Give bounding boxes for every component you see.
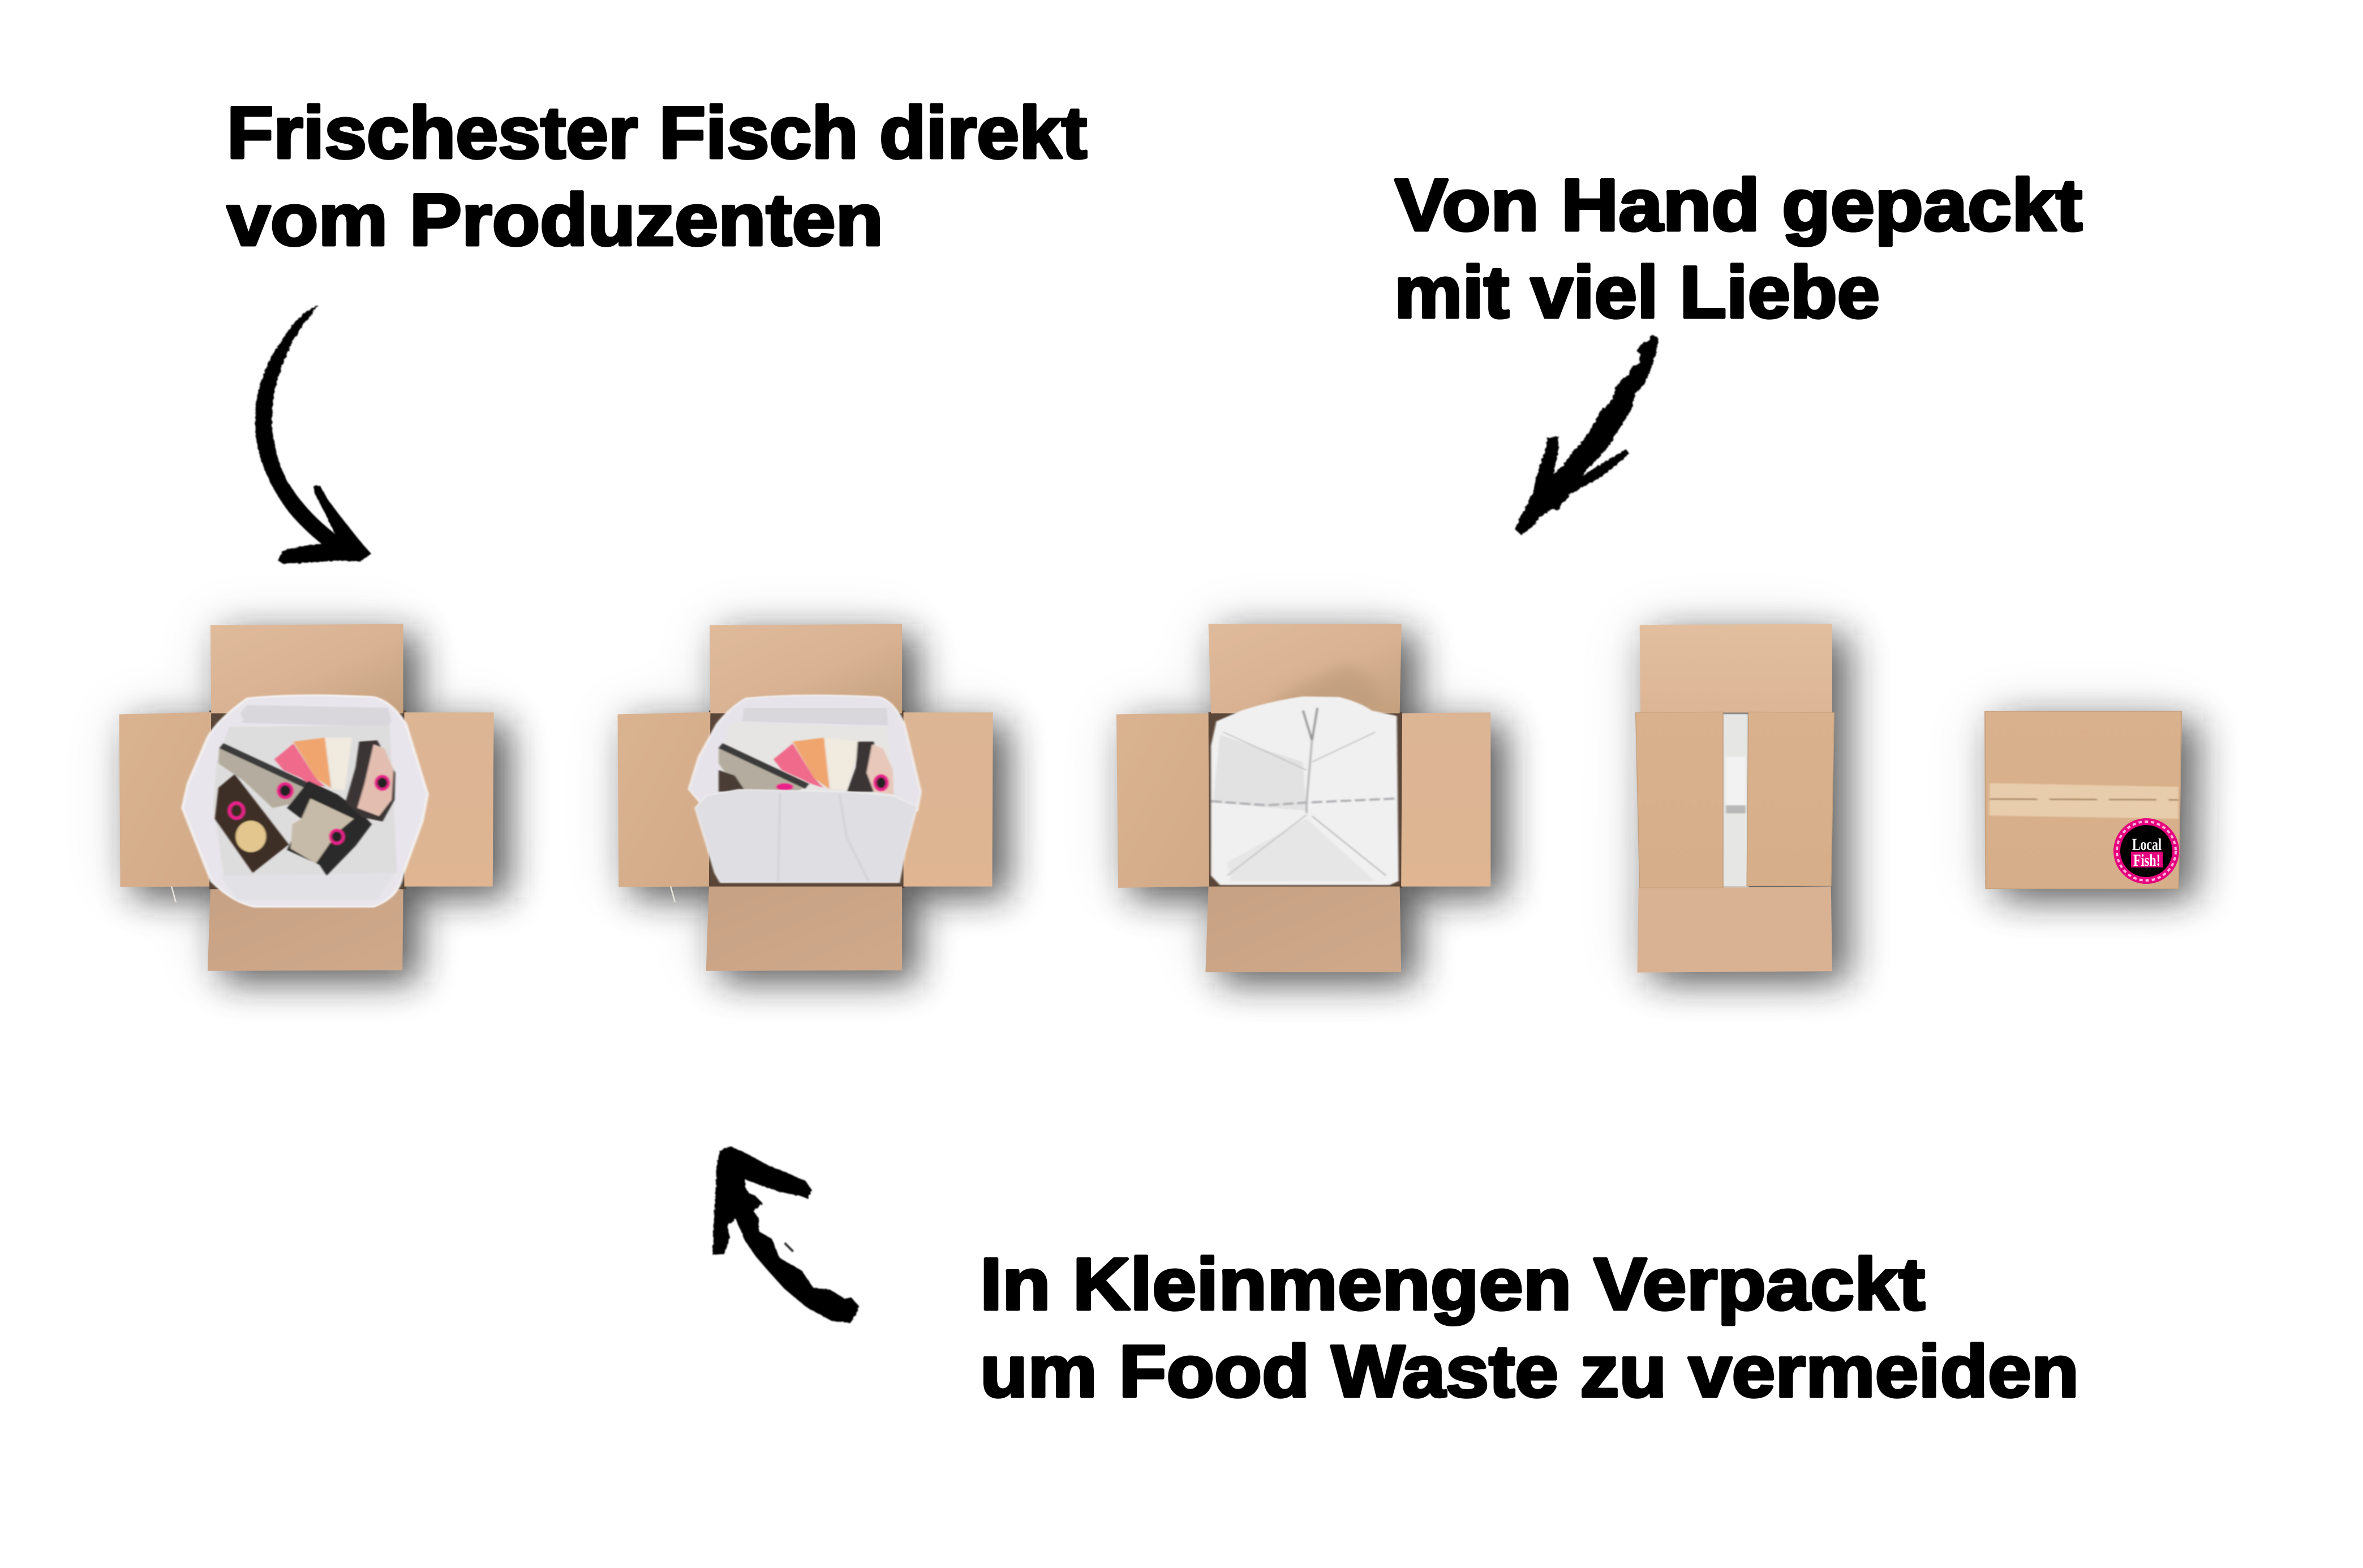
- box 4 side flaps: [1636, 712, 1834, 888]
- sticker: Local Fish logo: Fish!: [2133, 851, 2160, 870]
- box 5 packing tape: [1989, 783, 2179, 819]
- box 5 shadow: [1985, 711, 2197, 900]
- box 3 flaps: [1116, 624, 1490, 972]
- heading: Von Hand gepackt mit viel Liebe: Von Hand gepackt: [1395, 164, 2082, 246]
- heading: In Kleinmengen Verpackt um Food Waste zu vermeiden: um Food Waste zu vermeiden: [980, 1330, 2079, 1412]
- sticker: Local Fish logo: Local: [2132, 835, 2162, 854]
- box 2 folded insulation front: [695, 789, 917, 882]
- heading: Frischester Fisch direkt vom Produzenten: vom Produzenten: [227, 178, 883, 261]
- box 4 shadow: [1637, 625, 1848, 982]
- box 4 top and bottom flaps: [1637, 624, 1832, 973]
- box 2 fish products: [719, 737, 893, 794]
- sticker: Local Fish logo: [2113, 818, 2179, 884]
- box 5 body: [1985, 711, 2181, 888]
- box 4 visible parcel gap: [1722, 714, 1748, 887]
- box 2 shadow: [617, 625, 1008, 982]
- box 3: box with wrapped insulation parcel: [1116, 624, 1506, 983]
- arrow: curved arrow down to first box: [255, 306, 371, 564]
- box 3 wrapped parcel: [1211, 697, 1399, 885]
- box 3 shadow: [1116, 624, 1506, 983]
- heading: Von Hand gepackt mit viel Liebe: [1394, 164, 2082, 333]
- heading: In Kleinmengen Verpackt um Food Waste zu vermeiden: In Kleinmengen Verpackt: [980, 1243, 1925, 1325]
- box 1 fish products: [215, 737, 396, 875]
- heading: In Kleinmengen Verpackt um Food Waste zu vermeiden: [980, 1243, 2079, 1412]
- heading: Von Hand gepackt mit viel Liebe: mit viel Liebe: [1394, 251, 1880, 333]
- arrow: arrow up-left to second box: [713, 1147, 858, 1322]
- box 1 white insulation liner: [182, 695, 428, 907]
- box 1 flaps: [119, 624, 494, 971]
- box 4: box with side flaps folded: [1636, 624, 1848, 982]
- box 2 flaps: [617, 624, 993, 971]
- box 1 shadow: [119, 625, 509, 982]
- arrow: diagonal arrow down-left to third box: [1515, 336, 1658, 534]
- heading: Frischester Fisch direkt vom Produzenten: Frischester Fisch direkt: [227, 91, 1087, 174]
- box 5: closed box with tape: [1985, 711, 2197, 900]
- box 2 white insulation liner, back part: [689, 695, 921, 811]
- box 2: box with products half covered by insulation: [617, 624, 1008, 982]
- heading: Frischester Fisch direkt vom Produzenten: [227, 91, 1087, 261]
- box 1: open box with fish products: [119, 624, 509, 982]
